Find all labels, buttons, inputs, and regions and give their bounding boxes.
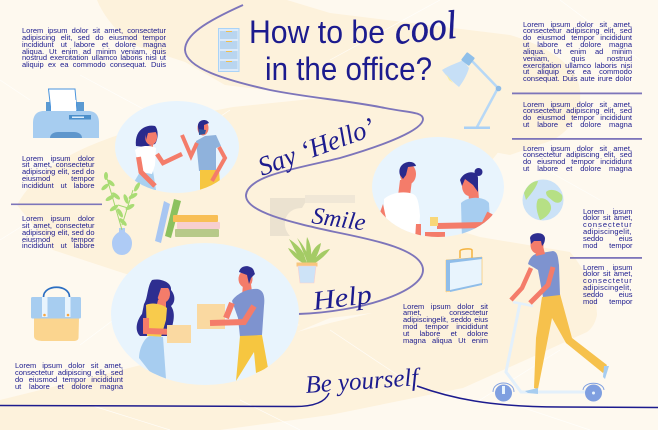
text block: left middle [22, 154, 94, 190]
text block: left middle: incididunt ut labore [22, 181, 94, 190]
text block: top left: aliqua. Ut enim ad minim veniam, quis [22, 47, 166, 56]
text block: narrow right lower: adipiscingelit, [583, 283, 632, 292]
text block: narrow right lower: seddo eius [583, 290, 632, 299]
text block: top left: Lorem ipsum dolor sit amet, consectetur [22, 26, 166, 35]
text block: center lower: adipiscingelit, seddo eius [403, 315, 488, 324]
text block: left lower [22, 214, 94, 250]
text block: right second: do eiusmod tempor incididunt [523, 113, 632, 122]
people: smile [372, 137, 504, 240]
text block: right second: Lorem ipsum dolor sit amet, [523, 100, 632, 108]
text block: narrow right upper [583, 206, 633, 250]
text block: top left: aliquip ex ea commodo consequat. Duis [22, 60, 166, 69]
divider rules [11, 92, 642, 259]
rider head [535, 246, 545, 256]
text block: right third [523, 144, 632, 173]
text block: bottom left: ut labore et dolore magna [15, 382, 123, 391]
text block: top right: do eiusmod tempor incididunt [523, 33, 632, 42]
man greeting [182, 120, 225, 190]
text block: bottom left: do eiusmod tempor incididunt [15, 375, 123, 384]
icon: briefcase [446, 249, 482, 292]
text block: right second [523, 100, 632, 129]
text block: left lower: eiusmod tempor [22, 235, 94, 244]
text block: center lower: ut labore et dolore [403, 329, 488, 338]
text block: narrow right upper: mod tempor [583, 241, 632, 250]
icon: printer [33, 89, 99, 138]
text block: top right: aliqua. Ut enim ad minim [523, 47, 632, 56]
text block: center lower: amet, consectetur [403, 308, 488, 317]
text block: top right [523, 20, 632, 83]
script labels: Help [310, 279, 373, 316]
text block: right third: Lorem ipsum dolor sit amet, [523, 144, 632, 152]
rider legs [534, 294, 607, 389]
text block: left lower: sit amet, consectetur [22, 221, 94, 230]
woman with box [137, 279, 191, 379]
light streak [297, 313, 372, 332]
text block: narrow right upper: consectetur [583, 220, 633, 229]
man with box [197, 266, 268, 381]
scooter [493, 302, 604, 402]
text block: narrow right upper: adipiscingelit, [583, 227, 632, 236]
woman greeting [134, 126, 182, 190]
text block: narrow right upper: Lorem ipsum [583, 206, 632, 216]
text block: left middle: Lorem ipsum dolor [22, 154, 94, 162]
text block: left lower: Lorem ipsum dolor [22, 214, 94, 223]
text block: narrow right lower [583, 262, 633, 306]
text block: left lower: incididunt ut labore [22, 241, 94, 250]
icon: file cabinet [218, 28, 239, 72]
text block: right second: consectetur adipiscing elit, sed [523, 106, 632, 115]
icon: globe [522, 180, 564, 220]
text block: left middle: eiusmod tempor [22, 174, 94, 183]
text block: center lower: Lorem ipsum dolor sit [403, 302, 488, 310]
icon: lamp [442, 52, 501, 129]
curved route line [185, 5, 423, 314]
title: in the office? [265, 51, 432, 87]
script labels: Be yourself [305, 364, 422, 399]
text block: right third: do eiusmod tempor incididunt [523, 157, 632, 166]
man smiling [378, 162, 421, 240]
text block: narrow right upper: dolor sit amet, [583, 213, 632, 222]
text block: narrow right lower: dolor sit amet, [583, 269, 632, 278]
title [249, 2, 459, 87]
text block: top right: Lorem ipsum dolor sit amet, [523, 20, 632, 28]
title: How to be [249, 14, 385, 50]
text block: top right: veniam, quis nostrud [523, 54, 632, 63]
text block: narrow right lower: Lorem ipsum [583, 262, 632, 272]
icon: potted plant [288, 237, 330, 283]
text block: right third: ut labore et dolore magna [523, 164, 632, 173]
script labels: Smile [310, 203, 368, 237]
text block: narrow right lower: consectetur [583, 276, 633, 285]
text block: top right: consectetur adipiscing elit, sed [523, 26, 632, 35]
people: greeting [115, 101, 239, 193]
text block: right second: ut labore et dolore magna [523, 120, 632, 129]
rider torso [528, 251, 560, 297]
text block: top right: ut aliquip ex ea commodo [523, 67, 632, 76]
icon: books [155, 199, 220, 243]
text block: left lower: adipiscing elit, sed do [22, 228, 94, 237]
icon: bag [31, 287, 81, 341]
text block: narrow right upper: seddo eius [583, 234, 632, 243]
text block: top left: adipiscing elit, sed do eiusmod tempor [22, 33, 166, 42]
text block: top right: consequat. Duis aute irure dolor [523, 74, 632, 83]
text block: right third: consectetur adipiscing elit, sed [523, 150, 632, 159]
people: help [111, 243, 299, 385]
text block: top left: nostrud exercitation ullamco laboris nisi ut [22, 53, 166, 62]
text block: top right: exercitation ullamco laboris nisi [523, 61, 632, 70]
icon: plant in vase [100, 172, 141, 255]
text block: bottom left [15, 361, 124, 391]
text block: bottom left: consectetur adipiscing elit, sed [15, 368, 123, 377]
text block: center lower: mod tempor incididunt [403, 322, 488, 331]
text block: top right: ut labore et dolore magna [523, 40, 632, 49]
title: cool [392, 2, 459, 53]
bottom line [0, 386, 658, 408]
text block: left middle: adipiscing elit, sed do [22, 167, 94, 176]
text block: narrow right lower: mod tempor [583, 297, 632, 306]
text block: top left: incididunt ut labore et dolore magna [22, 40, 166, 49]
woman smiling [425, 168, 491, 240]
watermark [270, 195, 355, 236]
text block: left middle: sit amet, consectetur [22, 160, 94, 169]
text block: top left [22, 26, 166, 69]
person on scooter [493, 233, 609, 402]
text block: center lower [403, 302, 488, 345]
script labels [254, 112, 422, 399]
text block: center lower: magna aliqua Ut enim [403, 336, 488, 345]
text block: bottom left: Lorem ipsum dolor sit amet, [15, 361, 123, 370]
script labels: Say ‘Hello’ [254, 112, 379, 182]
